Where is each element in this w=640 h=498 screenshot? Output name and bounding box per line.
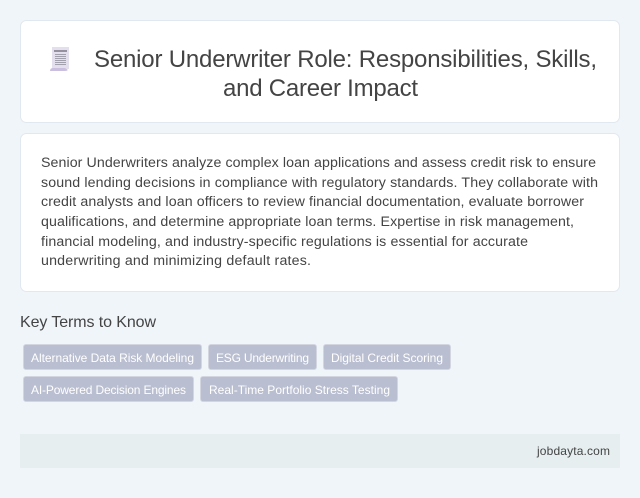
- description text: [41, 155, 598, 269]
- title: [94, 46, 597, 102]
- footer bar: [20, 434, 620, 468]
- footer source text: jobdayta.com: [536, 444, 610, 458]
- description text: Senior Underwriters analyze complex loan applications and assess credit risk to ensure: [41, 155, 596, 171]
- tag: ESG Underwriting: ESG Underwriting: [216, 351, 309, 365]
- panel: description: [20, 134, 620, 292]
- tag: AI-Powered Decision Engines: AI-Powered Decision Engines: [31, 383, 186, 397]
- tag: Real-Time Portfolio Stress Testing: [200, 376, 398, 402]
- panel: title card: [20, 20, 620, 122]
- tag: Digital Credit Scoring: [324, 344, 450, 370]
- description text: sound lending decisions in compliance with regulatory standards. They collaborate with: [41, 175, 598, 191]
- description text: credit analysts and loan officers to review financial documentation, evaluate borrower: [41, 194, 584, 210]
- title: Senior Underwriter Role: Responsibilities, Skills,: [94, 46, 597, 73]
- heading: key terms: Key Terms to Know: [20, 314, 156, 331]
- tag: ESG Underwriting: [208, 344, 316, 370]
- tag: Alternative Data Risk Modeling: Alternative Data Risk Modeling: [31, 351, 194, 365]
- tag: Digital Credit Scoring: Digital Credit Scoring: [331, 351, 443, 365]
- tag: AI-Powered Decision Engines: [24, 376, 194, 402]
- icon: document receipt: [50, 47, 69, 71]
- tag: Real-Time Portfolio Stress Testing: Real-Time Portfolio Stress Testing: [209, 383, 390, 397]
- description text: qualifications, and determine appropriate loan terms. Expertise in risk management,: [41, 214, 574, 230]
- description text: financial modeling, and industry-specific regulations is essential for accurate: [41, 234, 528, 250]
- title: and Career Impact: [223, 75, 418, 102]
- description text: underwriting and minimizing default rates.: [41, 253, 311, 269]
- tag: Alternative Data Risk Modeling: [24, 344, 202, 370]
